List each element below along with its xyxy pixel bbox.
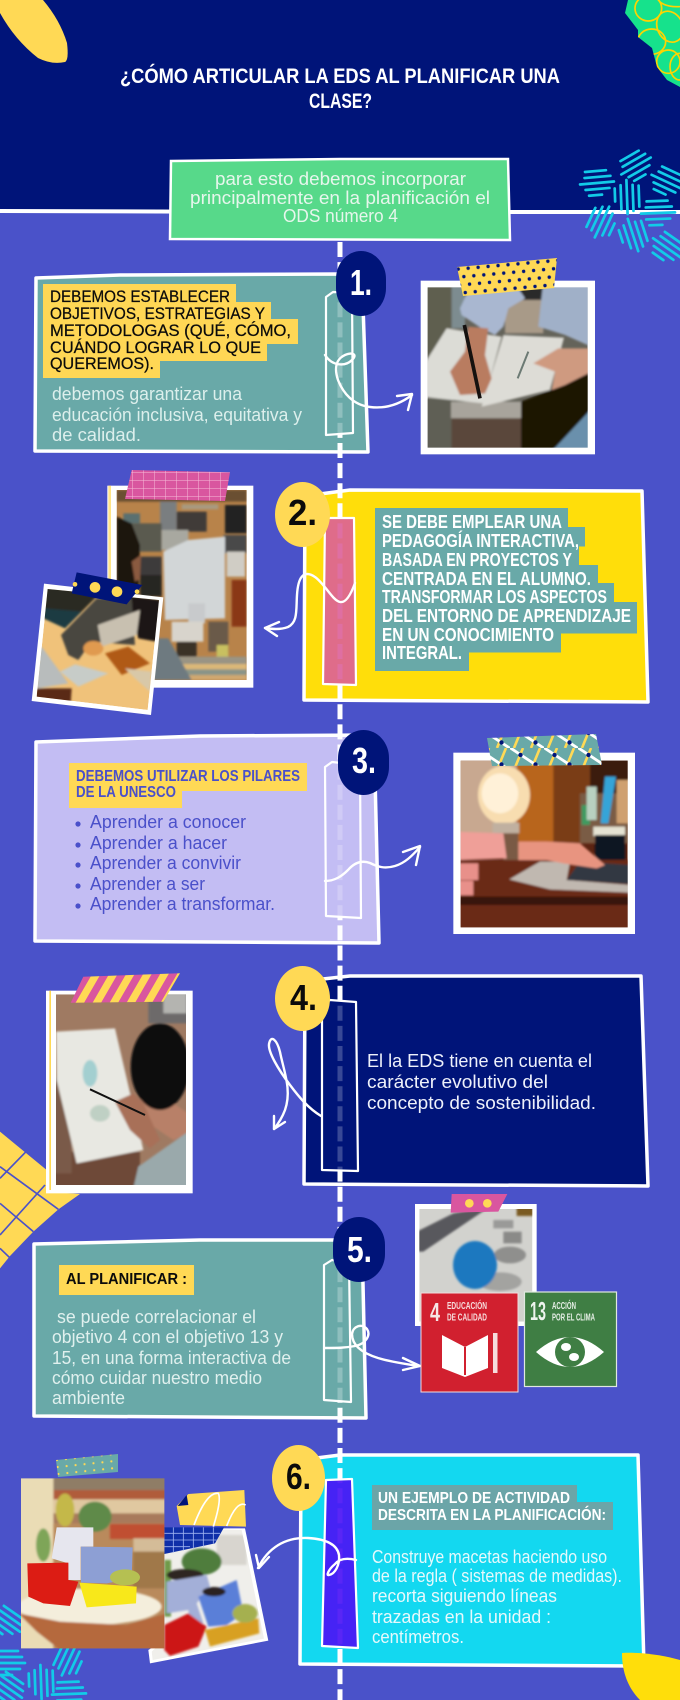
heading 5 xyxy=(59,1265,194,1295)
tape on photo 4 xyxy=(71,973,180,1003)
text 2 on teal highlight: PEDAGOGÍA INTERACTIVA, xyxy=(382,530,579,551)
intro box xyxy=(170,159,510,240)
heading 1 highlighted: DEBEMOS ESTABLECER xyxy=(50,287,230,306)
intro box: para esto debemos incorporar xyxy=(215,169,466,189)
timeline dashed line xyxy=(338,242,342,1700)
arrow 4 xyxy=(269,1039,321,1129)
photo 3 xyxy=(453,753,635,934)
SDG 4 card: 4 xyxy=(430,1297,440,1327)
tape pink 2 xyxy=(323,518,356,685)
photo 2 large xyxy=(107,486,253,688)
list of pillars: Aprender a transformar. xyxy=(90,894,275,914)
list of pillars: Aprender a conocer xyxy=(90,812,246,832)
photo 4 xyxy=(46,990,193,1193)
SDG 4 card xyxy=(421,1293,518,1392)
badge 3: 3. xyxy=(352,740,376,781)
title xyxy=(120,64,560,113)
heading 1 highlighted xyxy=(43,284,298,378)
decorative cyan hatches top right xyxy=(579,147,680,268)
photo 2 small xyxy=(32,584,163,715)
heading 3: DE LA UNESCO xyxy=(76,784,176,801)
tape outline 3 xyxy=(325,762,361,918)
step 3 xyxy=(69,730,635,934)
text 2 on teal highlight xyxy=(375,508,637,671)
SDG 4 card: DE CALIDAD xyxy=(447,1312,487,1324)
tape smileys xyxy=(72,572,142,604)
list of pillars: Aprender a ser xyxy=(90,874,205,894)
badge 6 xyxy=(272,1445,325,1511)
arrow 1 xyxy=(325,354,412,410)
text 2 on teal highlight: INTEGRAL. xyxy=(382,643,462,663)
text 6: de la regla ( sistemas de medidas). xyxy=(372,1566,622,1586)
decorative yellow blob top left xyxy=(0,0,68,63)
text 5: ambiente xyxy=(52,1388,125,1408)
tape navy grid xyxy=(164,1527,224,1554)
tape on photo 5 xyxy=(451,1194,507,1213)
badge 2 xyxy=(275,482,330,547)
tape outline 1 xyxy=(326,292,353,435)
text 1: de calidad. xyxy=(52,425,141,445)
text 5: objetivo 4 con el objetivo 13 y xyxy=(52,1327,283,1347)
text 6 xyxy=(372,1547,622,1647)
intro box: ODS número 4 xyxy=(283,206,398,226)
tape on photo 3 xyxy=(487,734,602,766)
heading 1 highlighted: METODOLOGAS (QUÉ, CÓMO, xyxy=(50,321,291,340)
panel backgrounds xyxy=(34,274,648,1666)
text 4: carácter evolutivo del xyxy=(367,1072,548,1092)
title: ¿CÓMO ARTICULAR LA EDS AL PLANIFICAR UNA xyxy=(120,64,560,88)
heading 6: DESCRITA EN LA PLANIFICACIÓN: xyxy=(378,1505,606,1524)
text 1 xyxy=(52,384,302,445)
heading 3: DEBEMOS UTILIZAR LOS PILARES xyxy=(76,768,300,785)
tape on photo 1 xyxy=(457,258,557,296)
text 6: Construye macetas haciendo uso xyxy=(372,1547,607,1567)
text 2 on teal highlight: EN UN CONOCIMIENTO xyxy=(382,625,554,645)
text 6: trazadas en la unidad : xyxy=(372,1607,551,1627)
photo 6 back xyxy=(148,1528,268,1663)
decorative yellow grid left xyxy=(0,1132,80,1268)
badge 3 xyxy=(338,730,389,795)
step 4 xyxy=(46,966,596,1193)
step 6 xyxy=(18,1445,622,1663)
heading 6 xyxy=(372,1485,613,1530)
SDG 13 card xyxy=(524,1292,616,1386)
list of pillars xyxy=(75,812,275,914)
text 1: educación inclusiva, equitativa y xyxy=(52,405,302,425)
text 2 on teal highlight: BASADA EN PROYECTOS Y xyxy=(382,550,572,570)
arrow 5 xyxy=(325,1326,420,1370)
heading 6: UN EJEMPLO DE ACTIVIDAD xyxy=(378,1490,570,1507)
text 4: concepto de sostenibilidad. xyxy=(367,1093,596,1113)
text 4: El la EDS tiene en cuenta el xyxy=(367,1051,592,1071)
heading 5: AL PLANIFICAR : xyxy=(66,1271,187,1288)
tape purple 6 xyxy=(322,1479,358,1648)
heading 1 highlighted: QUEREMOS). xyxy=(50,354,154,373)
text 6: centímetros. xyxy=(372,1627,464,1647)
SDG 13 card: ACCIÓN xyxy=(552,1299,576,1312)
SDG 4 card: EDUCACIÓN xyxy=(447,1299,487,1312)
title: CLASE? xyxy=(309,90,372,113)
photo 6 front xyxy=(18,1477,167,1650)
text 4 xyxy=(367,1051,596,1113)
tape outline 5 xyxy=(324,1260,351,1402)
text 2 on teal highlight: TRANSFORMAR LOS ASPECTOS xyxy=(382,587,607,607)
heading 1 highlighted: CUÁNDO LOGRAR LO QUE xyxy=(50,338,261,357)
intro box: principalmente en la planificación el xyxy=(190,188,490,208)
text 6: recorta siguiendo líneas xyxy=(372,1586,557,1606)
badge 6: 6. xyxy=(286,1456,311,1497)
badge 5: 5. xyxy=(347,1229,372,1270)
badge 4 xyxy=(275,966,330,1031)
tape yellow with scribble xyxy=(177,1490,246,1527)
text 5: se puede correlacionar el xyxy=(57,1307,256,1327)
heading 3 xyxy=(69,763,307,808)
badge 5 xyxy=(333,1217,385,1282)
arrow 6 xyxy=(256,1538,356,1575)
SDG 13 card: 13 xyxy=(530,1296,546,1326)
step 2 xyxy=(32,470,637,715)
SDG 13 card: POR EL CLIMA xyxy=(552,1312,595,1324)
tape on photo 2 xyxy=(125,470,230,501)
badge 4: 4. xyxy=(290,977,317,1018)
badge 1 xyxy=(336,251,386,316)
photo 1 xyxy=(421,281,595,455)
text 5 xyxy=(52,1307,291,1408)
step 1 xyxy=(43,251,595,455)
text 2 on teal highlight: CENTRADA EN EL ALUMNO. xyxy=(382,569,591,589)
arrow 3 xyxy=(325,846,420,881)
text 5: 15, en una forma interactiva de xyxy=(52,1348,291,1368)
decorative green blob top right xyxy=(625,0,680,87)
text 2 on teal highlight: SE DEBE EMPLEAR UNA xyxy=(382,512,562,532)
arrow 2 xyxy=(265,574,355,636)
text 1: debemos garantizar una xyxy=(52,384,243,404)
badge 2: 2. xyxy=(288,492,317,533)
step 5 xyxy=(52,1194,616,1408)
heading 1 highlighted: OBJETIVOS, ESTRATEGIAS Y xyxy=(50,304,265,323)
badge 1: 1. xyxy=(350,262,372,303)
text 2 on teal highlight: DEL ENTORNO DE APRENDIZAJE xyxy=(382,606,631,626)
photo 5 xyxy=(415,1204,537,1326)
decorative yellow blob bottom right xyxy=(622,1653,680,1700)
decorative cyan hatches bottom left xyxy=(0,1602,87,1700)
list of pillars: Aprender a convivir xyxy=(90,853,241,873)
header band xyxy=(0,0,680,212)
list of pillars: Aprender a hacer xyxy=(90,833,227,853)
text 5: cómo cuidar nuestro medio xyxy=(52,1368,262,1388)
tape outline 4 xyxy=(322,1000,358,1171)
tape on photo 6 xyxy=(56,1454,118,1477)
